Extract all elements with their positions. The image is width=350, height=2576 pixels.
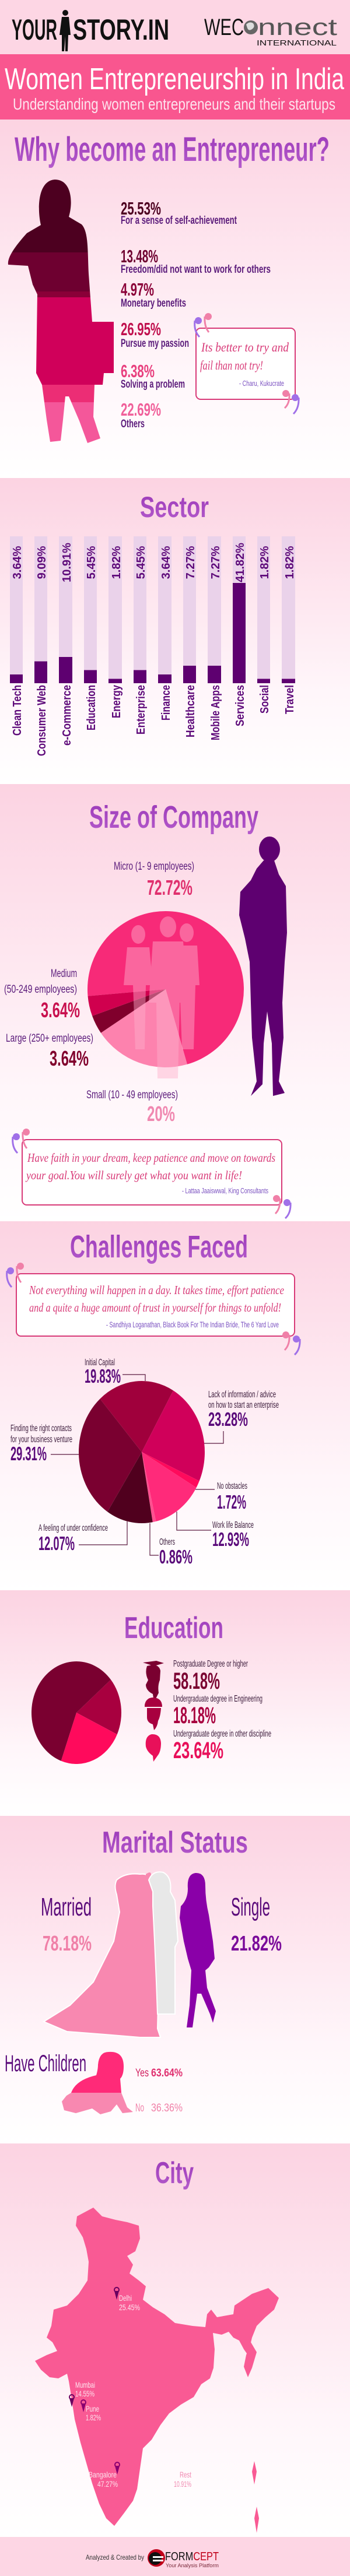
marital labels: 21.82% [231, 1931, 282, 1955]
pie labels: challenges: Lack of information / advice [208, 1390, 276, 1400]
reasons list [121, 198, 271, 430]
bar chart: sector: Energy [110, 684, 123, 718]
logo: WEConnect International: INTERNATIONAL [257, 38, 337, 47]
label: Rest: Rest [180, 2470, 191, 2479]
pie labels: company size: Large (250+ employees) [6, 1032, 93, 1045]
heading: City: City [155, 2156, 194, 2190]
bar chart: sector: 10.91% [61, 543, 74, 582]
bar chart: sector: Consumer Web [36, 685, 48, 756]
callout: quote Charu: fail than not try! [200, 358, 263, 372]
callout: quote Charu [195, 313, 299, 414]
bar chart: sector: 7.27% [184, 546, 197, 579]
footer: credits: Your Analysis Platform [166, 2563, 219, 2568]
pin: Mumbai [69, 2395, 74, 2407]
heading: Sector: Sector [140, 491, 209, 523]
bar chart: sector: 7.27% [209, 546, 222, 579]
bar chart: sector: Social [258, 685, 271, 714]
pie chart: challenges [79, 1381, 205, 1523]
pie chart: company size [88, 911, 244, 1078]
pie labels: challenges [10, 1358, 279, 1568]
icon: globe [244, 20, 258, 34]
education labels: Undergraduate degree in other discipline [173, 1729, 271, 1739]
bar chart: sector: 1.82% [284, 546, 296, 579]
callout: quote Lattaa [13, 1129, 290, 1218]
education labels: Undergraduate degree in Engineering [173, 1694, 262, 1704]
bar chart: sector: Healthcare [184, 685, 197, 737]
education labels: 58.18% [173, 1668, 220, 1694]
pie labels: challenges: Initial Capital [85, 1358, 115, 1368]
marital labels: Single [231, 1893, 270, 1921]
icon: woman head [146, 1734, 161, 1762]
pie labels: company size: Micro (1- 9 employees) [114, 860, 194, 873]
logo: WEConnect International: WEC [204, 15, 244, 40]
icon: graduate head [143, 1661, 164, 1702]
have children: 36.36% [151, 2102, 183, 2114]
bar chart: sector: Enterprise [135, 685, 148, 735]
education labels: 23.64% [173, 1738, 223, 1763]
people silhouettes overlay [124, 916, 200, 1078]
callout: quote Lattaa: - Lattaa Jaaiswwal, King Consultants [182, 1186, 268, 1195]
reasons list: Monetary benefits [121, 297, 186, 310]
callout: quote Sandhiya: Not everything will happen in a day. It takes time, effort patience [29, 1283, 284, 1297]
pie labels: challenges: 0.86% [159, 1546, 192, 1568]
logo: YourStory.in [12, 10, 169, 51]
logo: YourStory.in: YOUR [12, 13, 57, 46]
marital labels [41, 1893, 282, 1955]
pie labels: challenges: 1.72% [217, 1491, 246, 1513]
pie labels: challenges: for your business venture [10, 1435, 72, 1445]
pie labels: company size [4, 860, 194, 1126]
pie labels: challenges: 19.83% [85, 1365, 121, 1387]
pie labels: challenges: 12.93% [212, 1528, 249, 1550]
education labels [173, 1659, 271, 1763]
footer: credits [86, 2549, 219, 2568]
reasons list: Others [121, 418, 145, 430]
have children: No [135, 2102, 144, 2114]
have children [5, 2051, 183, 2114]
bar chart: sector: Travel [284, 685, 296, 714]
bar chart: sector: Clean Tech [11, 685, 24, 736]
bar chart: sector: Mobile Apps [209, 685, 222, 740]
map pins and city labels: Delhi [119, 2293, 132, 2303]
map pins and city labels: Pune [86, 2404, 99, 2413]
map pins and city labels: Bangalore [89, 2470, 117, 2479]
logo: WEConnect International: nnect [258, 15, 337, 40]
heading: Marital Status: Marital Status [102, 1826, 248, 1860]
reasons list: 13.48% [121, 246, 158, 266]
pin: Bangalore [115, 2462, 120, 2475]
callout: quote Sandhiya: and a quite a huge amount of trust in yourself for things to unfold! [29, 1301, 281, 1315]
reasons list: 26.95% [121, 319, 161, 339]
bar chart: sector: 1.82% [110, 546, 123, 579]
bar chart: sector: 9.09% [36, 546, 48, 579]
pie labels: company size: (50-249 employees) [4, 983, 77, 996]
pie labels: company size: Small (10 - 49 employees) [86, 1089, 178, 1101]
pie labels: challenges: No obstacles [217, 1481, 247, 1491]
icon: bride and groom [44, 1872, 178, 2037]
reasons list: Pursue my passion [121, 338, 189, 350]
marital labels: Married [41, 1893, 92, 1921]
bar chart: sector: Education [85, 685, 98, 730]
map pins and city labels: 47.27% [97, 2479, 118, 2489]
title banner [0, 54, 350, 120]
have children: 63.64% [151, 2067, 183, 2079]
reasons list: 4.97% [121, 279, 154, 300]
pie labels: company size: 20% [147, 1102, 175, 1126]
reasons list: Freedom/did not want to work for others [121, 263, 271, 276]
logo: WEConnect International [204, 15, 337, 47]
icon: crawling baby [62, 2052, 133, 2114]
heading: Challenges Faced: Challenges Faced [70, 1229, 248, 1264]
bar chart: sector: Services [234, 685, 247, 726]
reasons list: 22.69% [121, 399, 161, 420]
map: India [35, 2208, 279, 2533]
bar chart: sector: 5.45% [85, 546, 98, 579]
pie labels: company size: 3.64% [50, 1046, 89, 1070]
bar chart: sector [10, 536, 296, 756]
callout: quote Lattaa: Have faith in your dream, keep patience and move on towards [27, 1151, 275, 1165]
bar chart: sector: 5.45% [135, 546, 148, 579]
callout: quote Charu: Its better to try and [201, 340, 289, 354]
map pins and city labels: Mumbai [75, 2380, 95, 2389]
pie labels: company size: 72.72% [147, 876, 192, 899]
icon: formcept logo [148, 2549, 165, 2567]
icon: man figure [60, 10, 71, 51]
bar chart: sector: Finance [160, 685, 173, 721]
reasons list: 6.38% [121, 361, 155, 381]
pie labels: challenges: Finding the right contacts [10, 1424, 72, 1433]
pie labels: challenges: 29.31% [10, 1443, 47, 1464]
bar chart: sector: 41.82% [234, 543, 247, 582]
callout: quote Sandhiya [7, 1263, 300, 1355]
reasons list: Solving a problem [121, 378, 185, 391]
callout: quote Charu: - Charu, Kukucrate [239, 379, 284, 388]
pin: Delhi [114, 2287, 119, 2300]
map pins and city labels: 1.82% [86, 2413, 101, 2422]
pie labels: challenges: 12.07% [38, 1533, 75, 1554]
bar chart: sector: 1.82% [258, 546, 271, 579]
reasons list: 25.53% [121, 198, 161, 219]
pie labels: challenges: on how to start an enterprise [208, 1400, 279, 1410]
icon: purple businesswoman [239, 837, 287, 1096]
pie labels: challenges: Others [159, 1537, 175, 1547]
reasons list: For a sense of self-achievement [121, 215, 237, 227]
footer: credits: Analyzed & Created by [86, 2553, 144, 2561]
pie labels: challenges: Work life Balance [212, 1520, 254, 1530]
heading: Education: Education [124, 1611, 223, 1645]
have children: Have Children [5, 2051, 86, 2076]
heading: Size of Company: Size of Company [89, 800, 258, 835]
pie labels: challenges: A feeling of under confidence [38, 1523, 108, 1533]
map pins and city labels: 14.55% [75, 2389, 94, 2398]
bar chart: sector: 3.64% [11, 546, 24, 579]
leader lines: challenges [51, 1375, 223, 1555]
map pins and city labels: 10.91% [174, 2479, 191, 2489]
pie labels: challenges: 23.28% [208, 1408, 248, 1430]
pin: Pune [81, 2400, 86, 2412]
callout: quote Lattaa: your goal.You will surely get what you want in life! [25, 1168, 242, 1182]
map pins and city labels [69, 2287, 191, 2489]
education labels: 18.18% [173, 1703, 216, 1728]
icon: single woman [180, 1873, 216, 2027]
pie chart: education [32, 1661, 121, 1764]
woman silhouette striped by reason [8, 180, 114, 443]
map pins and city labels: 25.45% [119, 2303, 140, 2312]
bar chart: sector: e-Commerce [61, 685, 74, 746]
logo: YourStory.in: STORY.IN [73, 13, 169, 46]
pie labels: company size: 3.64% [41, 998, 80, 1022]
pie labels: company size: Medium [51, 968, 77, 980]
icon: engineer helmet head [145, 1698, 162, 1730]
marital labels: 78.18% [43, 1931, 92, 1955]
bar chart: sector: 3.64% [160, 546, 173, 579]
footer: credits: FORMCEPT [165, 2550, 219, 2563]
education labels: Postgraduate Degree or higher [173, 1659, 248, 1669]
have children: Yes [135, 2067, 149, 2079]
